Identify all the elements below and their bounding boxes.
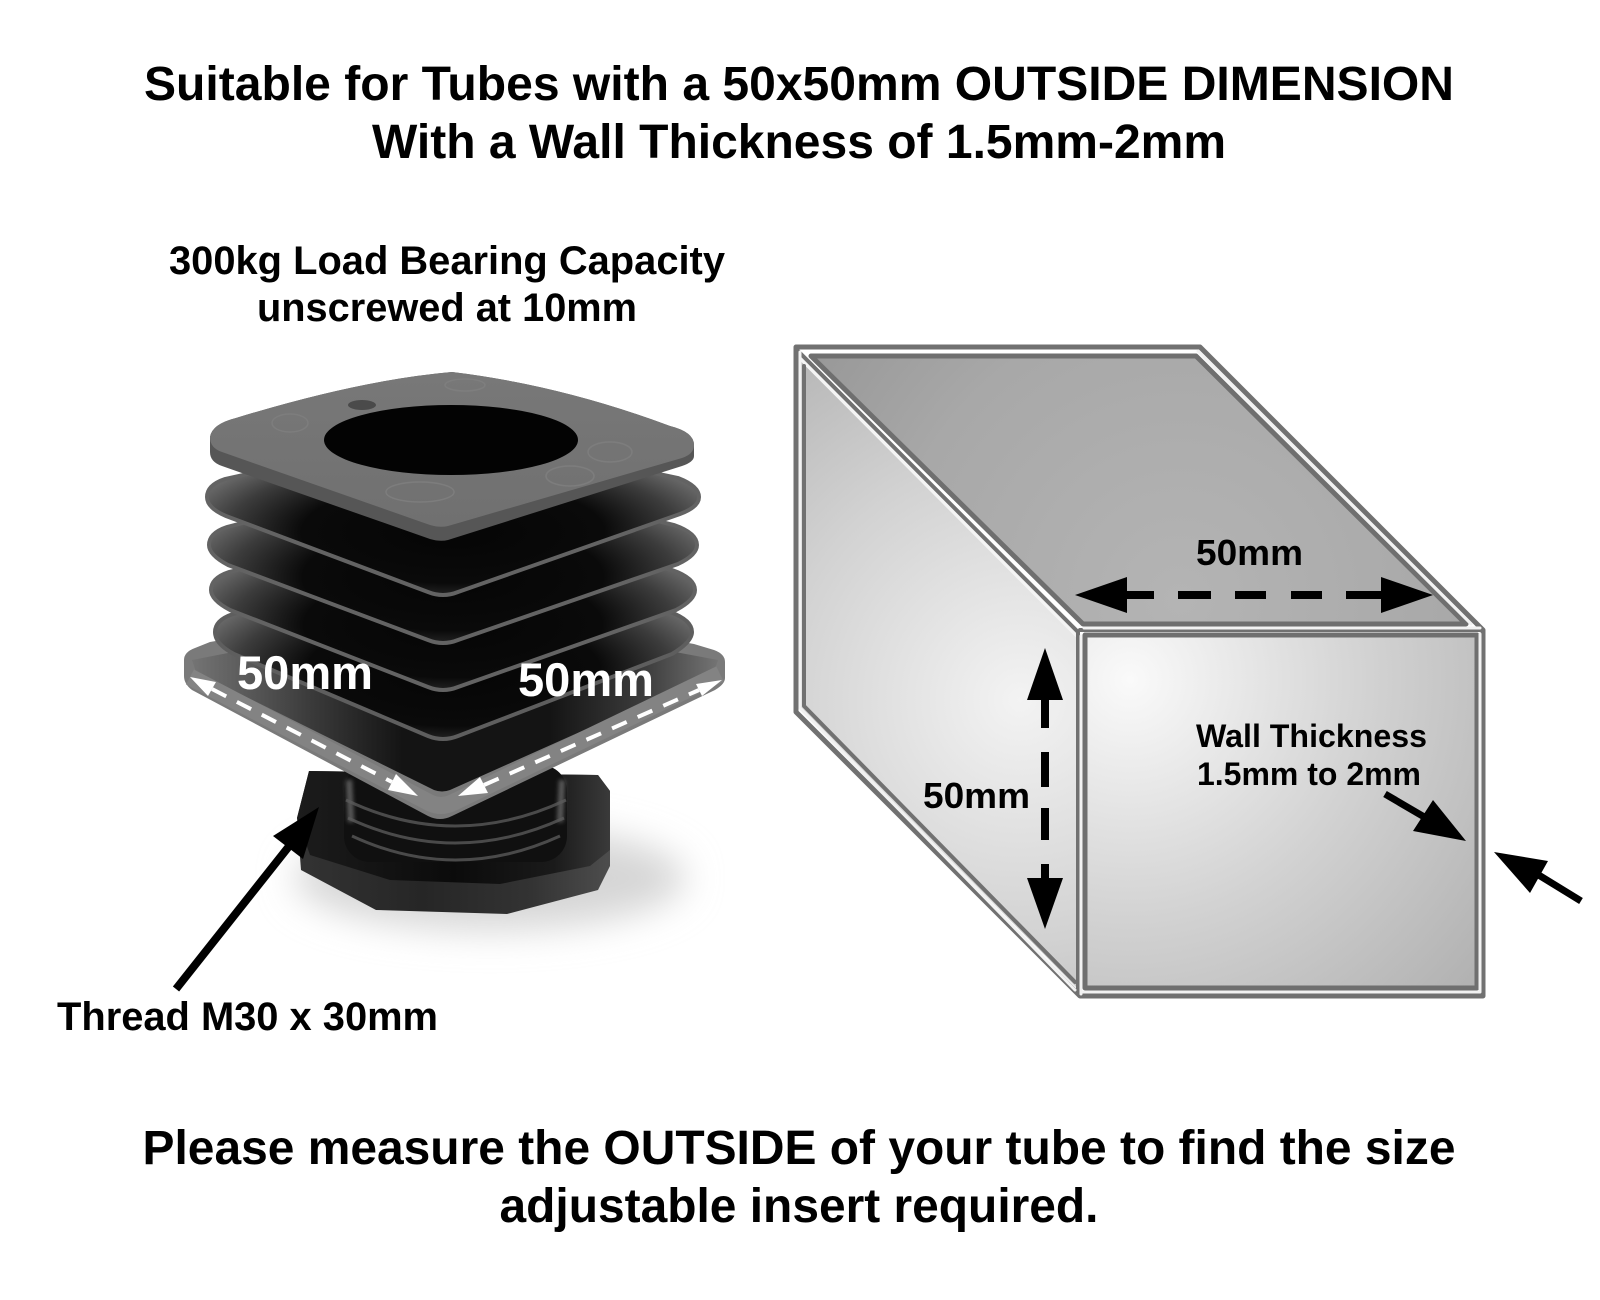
- outer wall arrow: [1494, 852, 1581, 901]
- load capacity text: 300kg Load Bearing Capacity: [169, 239, 726, 283]
- vertical 50mm dimension arrow: [1027, 648, 1063, 929]
- wall thickness label: [1196, 718, 1427, 792]
- bottom instruction: [142, 1121, 1456, 1233]
- top plate with hole: [210, 372, 694, 541]
- soft shadow: [295, 826, 685, 930]
- fin 2: [209, 470, 697, 643]
- white label: 50mm left: 50mm: [237, 646, 373, 699]
- bottom instruction: Please measure the OUTSIDE of your tube to find the size: [142, 1121, 1456, 1175]
- title: [144, 57, 1454, 169]
- wall thickness label: Wall Thickness: [1196, 718, 1427, 754]
- white label: 50mm right: 50mm: [518, 653, 654, 706]
- wall thickness label: 1.5mm to 2mm: [1197, 756, 1421, 792]
- product photo: adjustable insert: [184, 372, 725, 930]
- fin 3: [211, 518, 695, 690]
- base plate: [184, 600, 725, 819]
- vertical 50mm label: 50mm: [923, 775, 1030, 816]
- horizontal 50mm label: 50mm: [1196, 532, 1303, 573]
- thread: [344, 765, 567, 862]
- title: Suitable for Tubes with a 50x50mm OUTSIDE DIMENSION: [144, 57, 1454, 111]
- tube left face: [800, 356, 1077, 988]
- tube front face: [1085, 635, 1477, 988]
- fin 4: [215, 560, 692, 739]
- thread label: Thread M30 x 30mm: [57, 995, 438, 1039]
- square tube diagram: [796, 347, 1581, 996]
- tube top face: [812, 355, 1466, 624]
- load capacity text: [169, 239, 726, 330]
- horizontal 50mm dimension arrow: [1075, 577, 1433, 613]
- tube outlines: [796, 347, 1483, 996]
- bottom instruction: adjustable insert required.: [500, 1179, 1098, 1233]
- load capacity text: unscrewed at 10mm: [257, 286, 637, 330]
- white dimension arrows: [190, 677, 722, 796]
- threaded nut base: [297, 771, 610, 914]
- inner wall arrow: [1385, 794, 1466, 841]
- fin 1: [207, 430, 699, 595]
- title: With a Wall Thickness of 1.5mm-2mm: [372, 115, 1226, 169]
- embossed marks: [272, 379, 632, 502]
- arrow to thread: [176, 807, 319, 989]
